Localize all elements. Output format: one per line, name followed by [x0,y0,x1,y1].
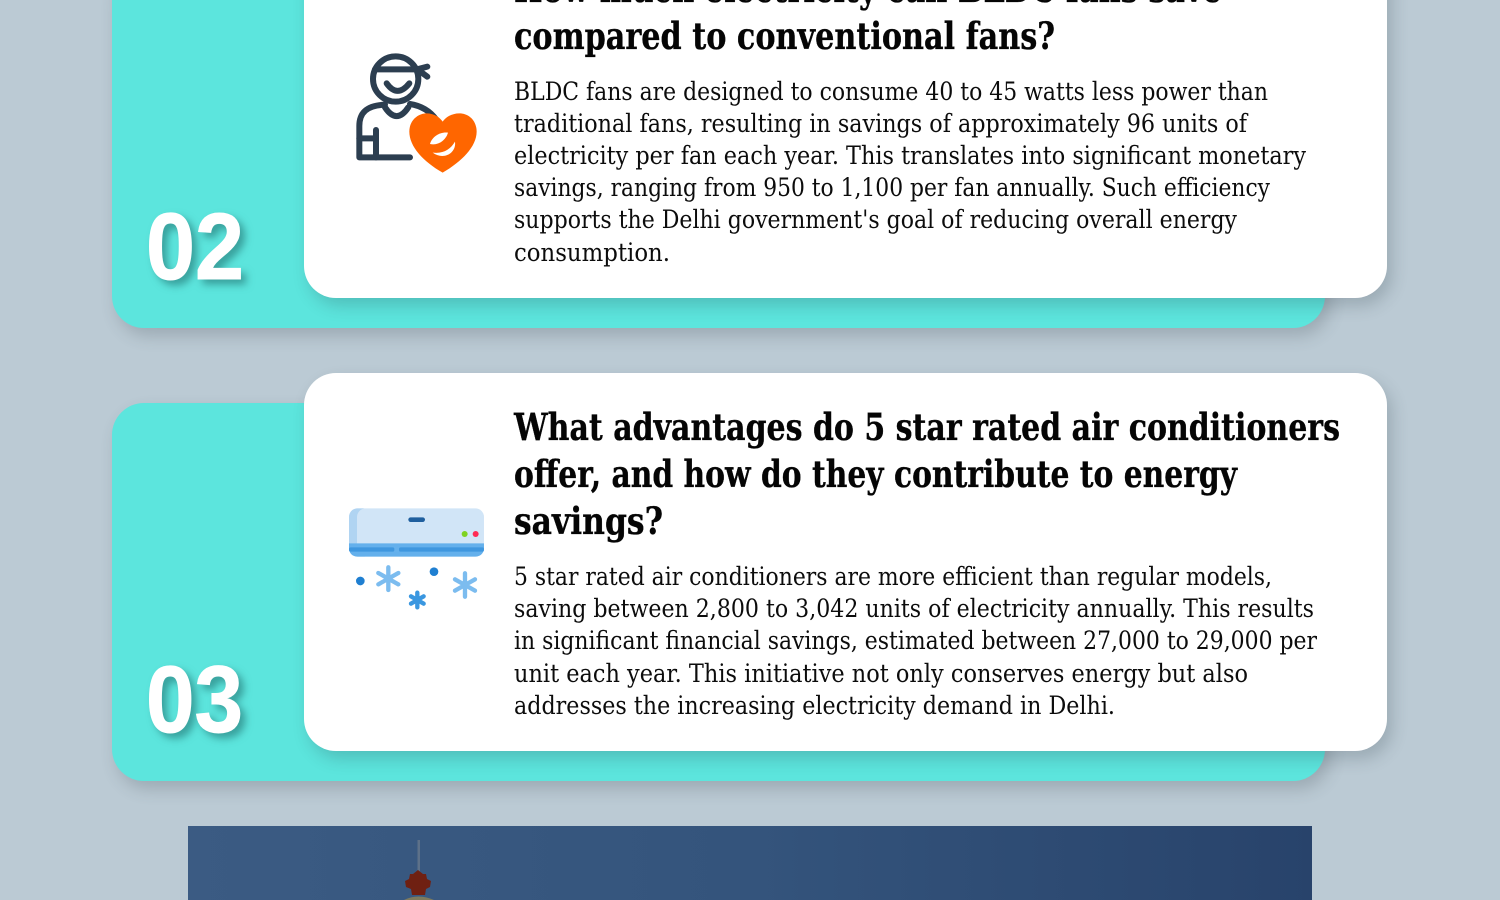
text block: card 02 answer: BLDC fans are designed to consume 40 to 45 watts less power than [514,77,1268,106]
text block: card 03 answer: addresses the increasing electricity demand in Delhi. [514,691,1115,720]
text block: card 02 answer: traditional fans, resulting in savings of approximately 96 units of [514,109,1249,138]
heading: card 02 question: compared to conventional fans? [514,14,1055,58]
number 02: 02 [146,194,244,300]
panel: card 03 white content [304,373,1387,751]
number 03: 03 [146,647,243,753]
panel: card 02 background [112,0,1325,328]
text block: card 03 answer: 5 star rated air conditioners are more efficient than regular models, [514,562,1272,591]
heading: card 03 question [513,405,1340,543]
text block: card 03 answer: saving between 2,800 to 3,042 units of electricity annually. This results [514,594,1314,623]
icon: worker with heart [359,56,477,173]
text block: card 03 answer [514,562,1317,720]
panel: card 02 white content [304,0,1387,298]
heading: card 03 question: offer, and how do they contribute to energy [514,452,1238,496]
text block: card 02 answer: supports the Delhi government's goal of reducing overall energy [514,205,1238,234]
icon: air conditioner with snowflakes [349,508,484,607]
text block: card 02 answer: consumption. [514,238,670,267]
text block: card 02 answer [514,77,1307,267]
text block: card 03 answer: in significant financial savings, estimated between 27,000 to 29,000 per [514,626,1317,655]
photo: government building against blue sky [188,826,1312,900]
heading: card 03 question: savings? [514,499,663,543]
text block: card 02 answer: electricity per fan each year. This translates into significant monetary [514,141,1307,170]
panel: card 03 background [112,403,1325,781]
text block: card 03 answer: unit each year. This initiative not only conserves energy but also [514,659,1248,688]
text block: card 02 answer: savings, ranging from 950 to 1,100 per fan annually. Such efficiency [514,173,1271,202]
